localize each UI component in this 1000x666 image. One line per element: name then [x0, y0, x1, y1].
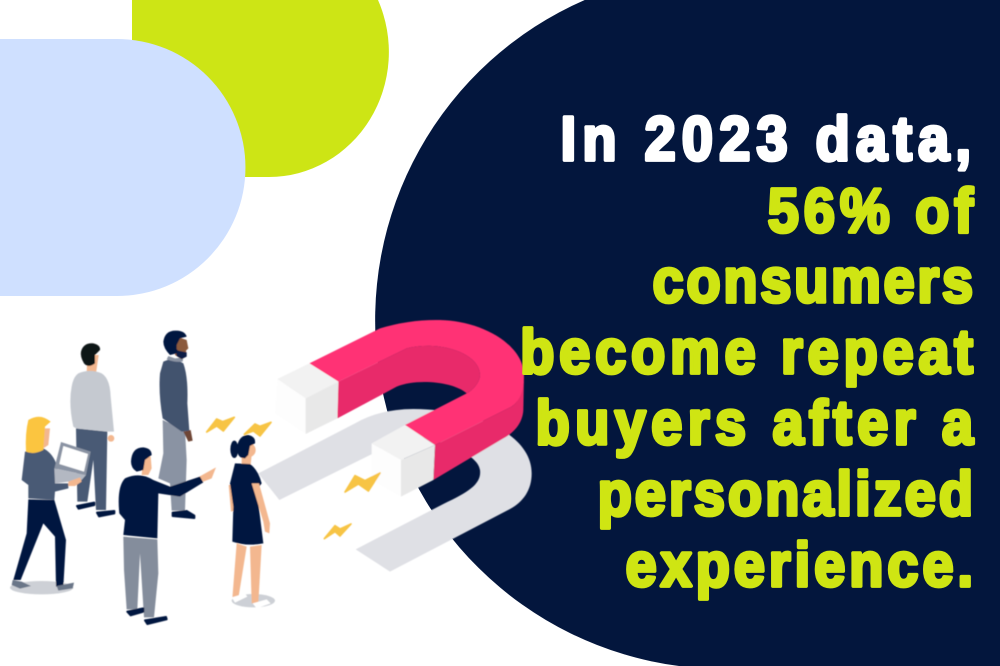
person: woman in navy dress	[229, 435, 275, 608]
headline line: buyers after a: buyers after a	[536, 389, 974, 458]
icon: lightning bolt	[324, 524, 351, 539]
icon: lightning bolt	[207, 417, 234, 432]
headline line: In 2023 data,: In 2023 data,	[561, 105, 971, 174]
person: blonde woman with laptop	[10, 417, 91, 594]
headline line: experience.: experience.	[626, 531, 973, 600]
magnet shadow	[258, 409, 532, 572]
magnet top surface	[309, 320, 524, 445]
person: tall bearded man	[158, 331, 194, 518]
person: pointing man	[119, 447, 216, 624]
navy circle background	[375, 0, 1000, 666]
icon: lightning bolt	[244, 422, 271, 436]
magnet right tip	[372, 425, 435, 497]
pale blue rounded shape	[0, 39, 245, 296]
icon: lightning bolt	[345, 473, 380, 492]
illustration: group of people	[10, 331, 275, 624]
headline line: consumers: consumers	[653, 247, 973, 316]
illustration: magnet	[258, 320, 532, 572]
person: man in grey sweater	[70, 343, 114, 516]
lime rounded shape	[132, 0, 389, 177]
headline text	[520, 105, 974, 600]
headline line: personalized: personalized	[598, 460, 973, 529]
headline line: 56% of: 56% of	[768, 177, 973, 246]
magnet inner wall	[337, 346, 480, 418]
headline line: become repeat: become repeat	[520, 318, 973, 387]
magnet left tip	[275, 363, 338, 434]
magnet outer wall	[433, 375, 524, 480]
